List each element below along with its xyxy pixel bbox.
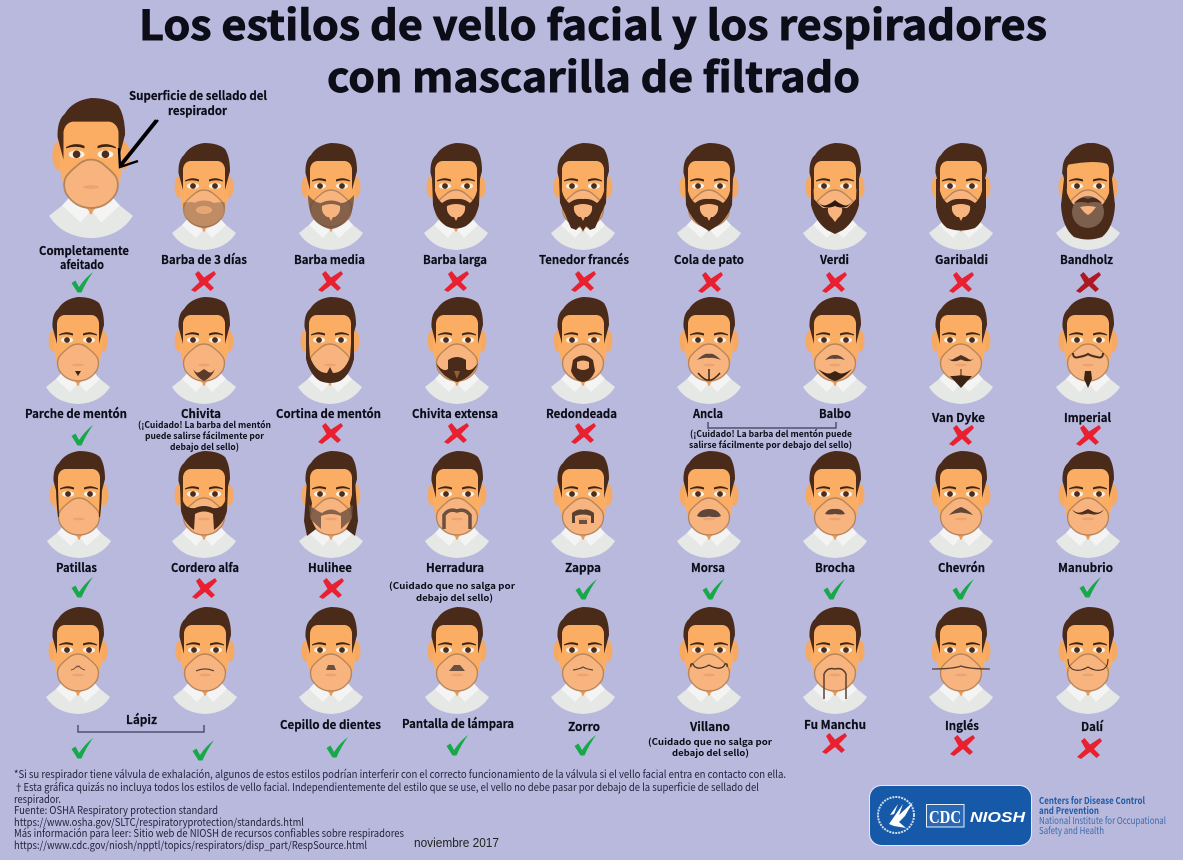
caution note bbox=[389, 579, 515, 604]
agency name: Centers for Disease Control bbox=[1039, 793, 1145, 807]
footnotes: *Si su respirador tiene válvula de exhalación, algunos de estos estilos podrían interferir con el correcto funcionamiento de la válvula si el vello facial entra en contacto con ella. bbox=[14, 767, 786, 782]
figure: Hulihee bbox=[299, 451, 363, 599]
mark: cross bbox=[318, 423, 343, 444]
label: Van Dyke bbox=[931, 409, 985, 426]
mark: check bbox=[72, 425, 93, 446]
label: Cola de pato bbox=[674, 251, 744, 268]
label: Inglés bbox=[945, 717, 979, 734]
label: Redondeada bbox=[546, 405, 617, 422]
callout: sealing surface: respirador bbox=[168, 102, 228, 119]
label: Parche de mentón bbox=[25, 405, 127, 422]
label: Manubrio bbox=[1058, 559, 1113, 576]
mark: check bbox=[72, 577, 93, 598]
mark: check bbox=[326, 737, 348, 758]
mark: check bbox=[72, 272, 93, 292]
portrait bbox=[425, 297, 489, 404]
label: Balbo bbox=[819, 405, 851, 422]
label: Ancla bbox=[692, 405, 723, 422]
portrait bbox=[803, 451, 867, 558]
label: Chivita extensa bbox=[412, 405, 498, 422]
footnotes: https://www.cdc.gov/niosh/npptl/topics/respirators/disp_part/RespSource.html bbox=[14, 838, 367, 853]
title bbox=[139, 0, 1047, 104]
mark: check bbox=[574, 735, 596, 756]
label line 2: afeitado bbox=[60, 256, 104, 273]
portrait bbox=[929, 607, 993, 714]
figure: Ancla bbox=[677, 297, 741, 422]
figure: Van Dyke bbox=[929, 297, 993, 446]
label: Completamente bbox=[39, 242, 129, 259]
figure: Villano bbox=[648, 607, 772, 759]
portrait bbox=[929, 297, 993, 404]
mark: check bbox=[446, 735, 468, 756]
mark: check bbox=[576, 579, 597, 600]
portrait bbox=[46, 297, 110, 404]
figure: Zorro bbox=[551, 607, 615, 756]
figure: Chivita extensa bbox=[412, 297, 498, 444]
label: Fu Manchu bbox=[804, 716, 866, 733]
portrait bbox=[425, 607, 489, 714]
callout: sealing surface bbox=[129, 87, 267, 119]
caution note bbox=[648, 735, 772, 759]
portrait bbox=[424, 143, 488, 250]
figure: Cordero alfa bbox=[171, 451, 239, 599]
caution note: debajo del sello) bbox=[416, 591, 493, 604]
portrait bbox=[49, 98, 133, 238]
agency name: Safety and Health bbox=[1039, 823, 1104, 837]
figure: Pantalla de lámpara bbox=[402, 607, 514, 756]
label: Cepillo de dientes bbox=[280, 716, 381, 733]
portrait bbox=[299, 607, 363, 714]
label: Pantalla de lámpara bbox=[402, 715, 514, 732]
arrow bbox=[119, 120, 158, 167]
figure: Manubrio bbox=[1056, 451, 1120, 598]
portrait bbox=[677, 607, 741, 714]
figure: Cortina de mentón bbox=[276, 297, 381, 444]
logo: CDC NIOSH: CDC bbox=[929, 807, 961, 827]
bracket: Ancla and Balbo with note: salirse fácilmente por debajo del sello) bbox=[689, 438, 852, 451]
caution note: (¡Cuidado! La barba del mentón bbox=[138, 418, 271, 431]
mark: cross bbox=[318, 271, 343, 292]
caution note: (Cuidado que no salga por bbox=[648, 735, 772, 748]
mark: cross bbox=[1076, 425, 1101, 446]
label: Herradura bbox=[426, 559, 484, 576]
portrait bbox=[173, 607, 237, 714]
logo: CDC NIOSH: NIOSH bbox=[970, 809, 1026, 826]
mark: cross bbox=[192, 578, 217, 599]
label: Bandholz bbox=[1060, 251, 1113, 268]
figure: Balbo bbox=[803, 297, 867, 422]
figure: Cepillo de dientes bbox=[280, 607, 381, 758]
caution note bbox=[138, 418, 271, 453]
label: Chevrón bbox=[938, 559, 985, 576]
mark: cross bbox=[822, 733, 847, 754]
figure: Parche de mentón bbox=[25, 297, 127, 446]
figure: Completamente afeitado bbox=[39, 98, 158, 292]
caution note: (Cuidado que no salga por bbox=[389, 579, 515, 592]
figure: Barba media bbox=[294, 143, 365, 292]
label: Barba media bbox=[294, 251, 365, 268]
footnotes bbox=[14, 767, 786, 853]
label: Cordero alfa bbox=[171, 559, 239, 576]
figure: Chivita bbox=[138, 297, 271, 453]
figure: Brocha bbox=[803, 451, 867, 600]
portrait bbox=[299, 451, 363, 558]
mark: cross bbox=[571, 423, 596, 444]
figure: Cola de pato bbox=[674, 143, 744, 293]
label: Villano bbox=[689, 718, 730, 735]
mark: cross bbox=[444, 423, 469, 444]
callout: sealing surface: Superficie de sellado del bbox=[129, 87, 267, 104]
caution note: debajo del sello) bbox=[170, 440, 239, 453]
portrait bbox=[551, 297, 615, 404]
agency name: and Prevention bbox=[1039, 803, 1099, 817]
figure: Imperial bbox=[1056, 297, 1120, 446]
mark: cross bbox=[191, 271, 216, 292]
figure: Redondeada bbox=[546, 297, 617, 444]
figure: Fu Manchu bbox=[803, 607, 867, 754]
figure: Lápiz (first) bbox=[46, 607, 110, 758]
mark: cross bbox=[698, 272, 723, 293]
mark: cross bbox=[444, 271, 469, 292]
footnotes: †Esta gráfica quizás no incluya todos los estilos de vello facial. Independientemente del estilo que se use, el vello no debe pasar por debajo de la superficie de sellado del bbox=[14, 780, 759, 795]
mark: cross bbox=[950, 735, 975, 756]
caution note: debajo del sello) bbox=[672, 746, 749, 759]
label: Patillas bbox=[56, 559, 97, 576]
footnotes: Más información para leer: Sitio web de NIOSH de recursos confiables sobre respiradores bbox=[14, 826, 404, 841]
agency name bbox=[1039, 793, 1166, 837]
mark: check bbox=[192, 740, 214, 760]
label: Chivita bbox=[181, 405, 221, 422]
mark: check bbox=[72, 738, 93, 758]
portrait bbox=[298, 297, 362, 404]
bracket: Ancla and Balbo with note bbox=[689, 422, 852, 451]
caution note: puede salirse fácilmente por bbox=[145, 429, 264, 442]
figure: Herradura bbox=[389, 451, 515, 604]
footnotes: Fuente: OSHA Respiratory protection standard bbox=[14, 803, 218, 818]
portrait bbox=[1056, 607, 1120, 714]
bracket: Lápiz label: Lápiz bbox=[126, 711, 157, 728]
portrait bbox=[172, 143, 236, 250]
mark: check bbox=[1080, 577, 1101, 598]
figure: Dalí bbox=[1056, 607, 1120, 759]
mark: check bbox=[702, 579, 724, 600]
label: Cortina de mentón bbox=[276, 405, 381, 422]
mark: cross bbox=[1077, 738, 1102, 759]
footnotes: https://www.osha.gov/SLTC/respiratoryprotection/standards.html bbox=[14, 815, 304, 830]
bracket: Lápiz label bbox=[78, 711, 204, 732]
portrait bbox=[677, 451, 741, 558]
label: Garibaldi bbox=[935, 251, 988, 268]
portrait bbox=[803, 297, 867, 404]
portrait bbox=[172, 297, 236, 404]
figure: Morsa bbox=[677, 451, 741, 600]
label: Barba larga bbox=[423, 251, 487, 268]
portrait bbox=[46, 607, 110, 714]
figure: Inglés bbox=[929, 607, 993, 756]
mark: dark cross bbox=[1076, 272, 1101, 293]
portrait bbox=[299, 143, 363, 250]
portrait bbox=[677, 297, 741, 404]
label: Barba de 3 días bbox=[161, 251, 247, 268]
label: Brocha bbox=[815, 559, 855, 576]
portrait bbox=[551, 451, 615, 558]
figure: Barba larga bbox=[423, 143, 488, 292]
date: noviembre 2017 bbox=[414, 836, 499, 850]
portrait bbox=[1056, 297, 1120, 404]
mark: cross bbox=[949, 272, 974, 293]
logo: CDC NIOSH bbox=[870, 786, 1032, 846]
portrait bbox=[47, 451, 111, 558]
label: Verdi bbox=[819, 251, 849, 268]
portrait bbox=[425, 451, 489, 558]
figure: Verdi bbox=[803, 143, 867, 293]
figure: Garibaldi bbox=[929, 143, 993, 293]
mark: cross bbox=[319, 578, 344, 599]
mark: check bbox=[824, 579, 845, 600]
label: Tenedor francés bbox=[539, 251, 629, 268]
bracket: Ancla and Balbo with note: (¡Cuidado! La barba del mentón puede bbox=[690, 427, 852, 440]
mark: cross bbox=[822, 272, 847, 293]
label: Zorro bbox=[568, 718, 600, 735]
label: Imperial bbox=[1064, 409, 1111, 426]
figure: Zappa bbox=[551, 451, 615, 600]
figure: Tenedor francés bbox=[539, 143, 629, 292]
label: Morsa bbox=[691, 559, 725, 576]
icon: HHS seal bbox=[878, 797, 914, 833]
portrait bbox=[929, 451, 993, 558]
figure: Lápiz (second) bbox=[173, 607, 237, 760]
label: Zappa bbox=[565, 559, 601, 576]
figure: Chevrón bbox=[929, 451, 993, 600]
label: Hulihee bbox=[308, 559, 352, 576]
portrait bbox=[551, 143, 615, 250]
footnotes: respirador. bbox=[14, 792, 61, 807]
mark: check bbox=[952, 579, 974, 600]
figure: Patillas bbox=[47, 451, 111, 598]
mark: cross bbox=[949, 425, 974, 446]
portrait bbox=[803, 607, 867, 714]
title: con mascarilla de filtrado bbox=[327, 44, 860, 104]
portrait bbox=[172, 451, 236, 558]
portrait bbox=[677, 143, 741, 250]
label: Dalí bbox=[1081, 718, 1104, 735]
portrait bbox=[803, 143, 867, 250]
portrait bbox=[1056, 451, 1120, 558]
portrait bbox=[551, 607, 615, 714]
figure: Bandholz bbox=[1056, 143, 1120, 293]
portrait bbox=[929, 143, 993, 250]
portrait bbox=[1056, 143, 1120, 250]
mark: cross bbox=[571, 271, 596, 292]
figure: Barba de 3 días bbox=[161, 143, 247, 292]
